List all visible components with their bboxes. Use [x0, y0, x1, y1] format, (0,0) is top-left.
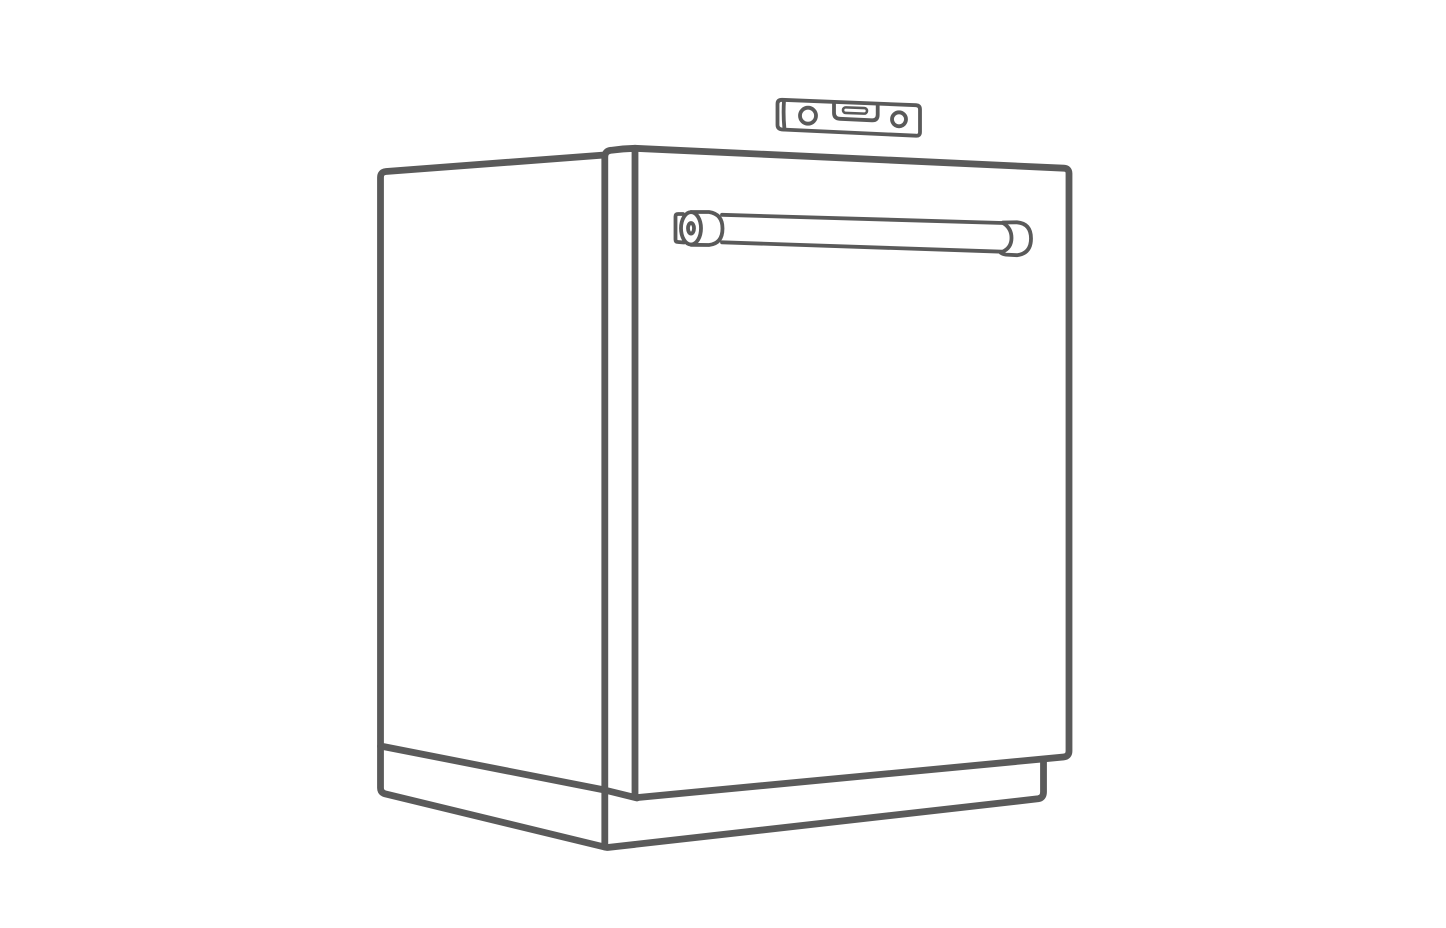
door handle: [676, 212, 1031, 255]
left mount: [676, 214, 684, 242]
handle bar: [722, 215, 1003, 252]
front door: [635, 148, 1069, 798]
vial slot: [843, 107, 867, 114]
bubble window right: [892, 112, 906, 126]
left knob: [691, 212, 722, 245]
door edge strip: [604, 148, 637, 847]
plinth base: [380, 746, 1044, 848]
spirit level: [778, 100, 920, 136]
level body: [778, 100, 920, 136]
centre vial notch: [834, 102, 878, 120]
side panel: [380, 155, 604, 790]
dishwasher cabinet: [380, 148, 1069, 848]
right cap: [1000, 222, 1031, 255]
bubble window left: [800, 108, 816, 124]
